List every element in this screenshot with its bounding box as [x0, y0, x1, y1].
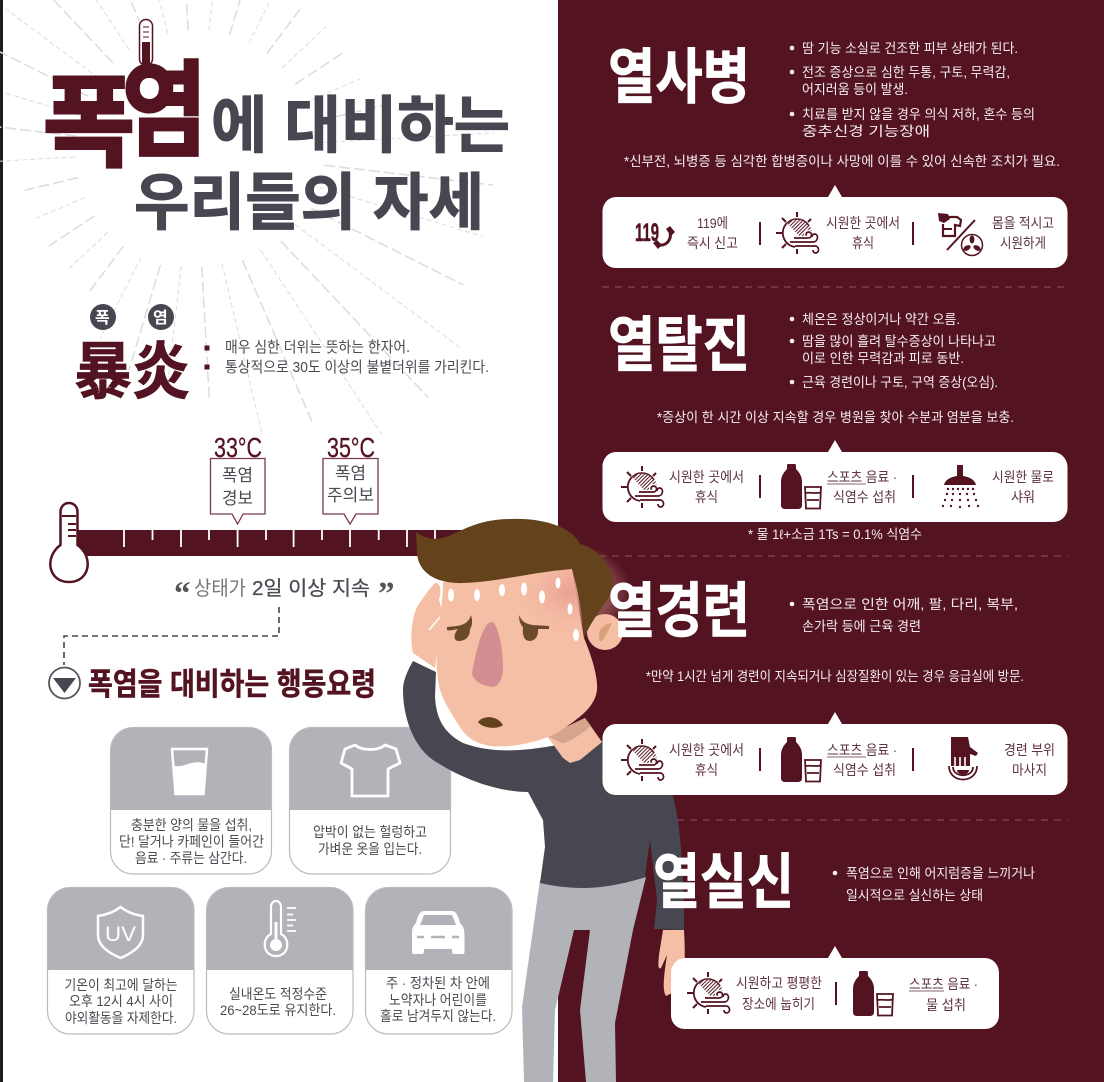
icon: down triangle: [49, 668, 80, 698]
action box: 시원한 곳에서: [669, 469, 744, 485]
callout: 33도 폭염 경보: 경보: [222, 489, 253, 508]
card: car: 홀로 남겨두지 않는다.: [380, 1008, 496, 1024]
gauge bar: [70, 530, 475, 556]
action box: 스포츠 음료 ·: [827, 742, 897, 758]
card: water: 충분한 양의 물을 섭취,: [131, 817, 252, 833]
symptom list: 손가락 등에 근육 경련: [802, 619, 921, 634]
man: lower hand: [658, 930, 685, 996]
card: car: [366, 888, 512, 1034]
right maroon panel: [558, 0, 1104, 1082]
definition block: [74, 304, 489, 411]
icon: thermometer on title: [140, 20, 152, 66]
man: nose: [472, 622, 503, 687]
man: mouth: [478, 717, 503, 728]
section: 열탈진: [602, 312, 1068, 542]
card: indoor temperature: [206, 888, 353, 1034]
symptom list: 근육 경련이나 구토, 구역 증상(오심).: [802, 375, 998, 390]
icon: glass: [172, 749, 207, 795]
callout: 35도 폭염 주의보: 주의보: [327, 486, 374, 505]
card: UV: 기온이 최고에 달하는: [64, 977, 178, 993]
action box: 119에: [697, 215, 728, 231]
icon: massage hand: [949, 737, 978, 780]
title word: 폭: 폭: [43, 68, 135, 180]
section title: 열실신: [653, 849, 794, 916]
icon: gauge thermometer: [50, 503, 88, 582]
icon: sports drink: [853, 971, 893, 1016]
card: clothes: 압박이 없는 헐렁하고: [313, 824, 427, 840]
temperature gauge: [50, 432, 475, 582]
card: indoor temperature: 실내온도 적정수준: [229, 986, 327, 1002]
action box: 식염수 섭취: [833, 489, 896, 505]
icon: t-shirt: [341, 745, 400, 796]
action box: 시원한 물로: [992, 469, 1054, 485]
action box: 휴식: [695, 762, 718, 778]
icon: shade and wind: [621, 739, 664, 781]
duration quote: “: [174, 576, 190, 612]
icon: shade and wind: [621, 466, 664, 508]
callout: 33도 폭염 경보: [210, 432, 265, 524]
man: torso and arms: [403, 661, 684, 930]
action box: 휴식: [852, 235, 874, 251]
man: forehead blush: [508, 544, 632, 640]
card: water: [110, 728, 272, 874]
icon: UV shield: UV: [105, 923, 136, 946]
card: indoor temperature: 26~28도로 유지한다.: [220, 1002, 336, 1018]
callout: 35도 폭염 주의보: [323, 432, 378, 524]
symptom list: [833, 866, 1035, 903]
title: [43, 20, 510, 238]
action box: [671, 946, 999, 1029]
man: hair: [416, 519, 614, 638]
man: hand on forehead: [411, 583, 444, 668]
symptom list: [790, 312, 998, 390]
card: clothes: [290, 728, 451, 874]
section: 열사병: [602, 41, 1068, 268]
action box: 시원한 곳에서: [826, 215, 900, 231]
action box: 식염수 섭취: [833, 762, 896, 778]
action box: [602, 185, 1068, 268]
icon: wet shirt and fan: [938, 213, 982, 256]
callout: 33도 폭염 경보: 33°C: [214, 432, 262, 463]
section: 열실신: [653, 849, 1035, 1029]
symptom list: 체온은 정상이거나 약간 오름.: [802, 312, 960, 327]
icon: car: [412, 911, 464, 954]
title word: 염: 염: [122, 54, 207, 170]
action box: 시원하게: [1000, 235, 1046, 251]
symptom list: [790, 597, 1018, 634]
action box: 스포츠 음료 ·: [827, 469, 897, 485]
note: *증상이 한 시간 이상 지속할 경우 병원을 찾아 수분과 염분을 보충.: [657, 410, 1014, 425]
action box: 장소에 눕히기: [742, 996, 815, 1012]
icon: sports drink: [781, 464, 821, 509]
action box: 몸을 적시고: [992, 215, 1054, 231]
card: car: 주 · 정차된 차 안에: [386, 975, 490, 991]
symptom list: [790, 41, 1035, 139]
action box: 마사지: [1012, 762, 1047, 778]
symptom list: 치료를 받지 않을 경우 의식 저하, 혼수 등의: [802, 107, 1035, 122]
icon: shower: [942, 465, 979, 508]
symptom list: 폭염으로 인한 어깨, 팔, 다리, 복부,: [802, 597, 1018, 612]
man: ear: [587, 614, 623, 650]
card: clothes: 가벼운 옷을 입는다.: [318, 841, 422, 857]
action box: 휴식: [695, 489, 718, 505]
icon: sports drink: [781, 737, 821, 782]
duration quote: 2일 이상 지속: [252, 577, 370, 600]
symptom list: 이로 인한 무력감과 피로 동반.: [802, 351, 964, 366]
definition text: 매우 심한 더위는 뜻하는 한자어.: [225, 339, 410, 356]
symptom list: 어지러움 등이 발생.: [802, 82, 908, 97]
callout: 35도 폭염 주의보: 폭염: [335, 464, 366, 483]
icon: UV shield: [98, 907, 143, 958]
dashed connector: [64, 607, 279, 665]
icon: thermometer: [265, 901, 296, 956]
note: *만약 1시간 넘게 경련이 지속되거나 심장질환이 있는 경우 응급실에 방문.: [646, 669, 1024, 684]
callout: 35도 폭염 주의보: 35°C: [327, 432, 375, 463]
card: UV: 야외활동을 자제한다.: [65, 1010, 177, 1026]
action cards: [48, 728, 512, 1034]
icon: 119 phone: 119: [635, 219, 659, 247]
icon: shade and wind: [776, 212, 819, 254]
action box: 경련 부위: [1004, 742, 1055, 758]
man: trousers: [522, 877, 646, 1082]
title line one: 에 대비하는: [211, 92, 510, 161]
action box: 스포츠 음료 ·: [909, 976, 978, 992]
icon: shade and wind: [687, 972, 730, 1014]
action box: 샤워: [1011, 489, 1035, 505]
duration quote: 상태가: [194, 577, 246, 600]
illustration: man suffering from heat: [403, 519, 685, 1082]
section: 열경련: [602, 578, 1068, 795]
definition text: 통상적으로 30도 이상의 불볕더위를 가리킨다.: [225, 359, 489, 376]
action box: 즉시 신고: [687, 235, 738, 251]
badge: 폭: 폭: [95, 310, 110, 327]
action box: 물 섭취: [926, 997, 966, 1013]
man: eyes and brows: [447, 615, 549, 641]
hanja heading: 暴炎: [74, 321, 190, 411]
symptom list: 중추신경 기능장애: [802, 124, 930, 139]
card: water: 음료 · 주류는 삼간다.: [135, 850, 247, 866]
action box: [602, 440, 1068, 522]
title line two: 우리들의 자세: [134, 169, 484, 238]
action box: [602, 712, 1068, 795]
card: UV: [48, 888, 194, 1034]
section title: 열탈진: [608, 312, 750, 379]
section heading: 행동요령: 폭염을 대비하는 행동요령: [88, 667, 376, 702]
footnote: * 물 1ℓ+소금 1Ts = 0.1% 식염수: [748, 527, 922, 542]
card: car: 노약자나 어린이를: [389, 992, 487, 1008]
callout: 33도 폭염 경보: 폭염: [222, 466, 253, 485]
definition text: [204, 339, 489, 376]
badge: 염: [148, 304, 174, 330]
man: sweat drops: [448, 578, 579, 641]
man: face: [437, 569, 597, 746]
duration quote: ”: [378, 576, 394, 612]
man: neck: [547, 718, 602, 763]
badge: 염: 염: [153, 309, 168, 327]
symptom list: 전조 증상으로 심한 두통, 구토, 무력감,: [802, 65, 1010, 80]
symptom list: 땀을 많이 흘려 탈수증상이 나타나고: [802, 334, 996, 349]
section title: 열사병: [608, 44, 750, 111]
action box: 시원한 곳에서: [669, 742, 744, 758]
badge: 폭: [90, 304, 116, 330]
symptom list: 일시적으로 실신하는 상태: [846, 888, 983, 903]
symptom list: 폭염으로 인해 어지럼증을 느끼거나: [846, 866, 1035, 881]
section title: 열경련: [608, 578, 750, 645]
duration quote: [174, 576, 394, 612]
note: *신부전, 뇌병증 등 심각한 합병증이나 사망에 이를 수 있어 신속한 조치가 필요.: [624, 154, 1060, 169]
action box: 시원하고 평평한: [736, 975, 822, 991]
symptom list: 땀 기능 소실로 건조한 피부 상태가 된다.: [802, 41, 1018, 56]
card: water: 단! 달거나 카페인이 들어간: [119, 834, 264, 850]
card: UV: 오후 12시 4시 사이: [69, 993, 173, 1009]
